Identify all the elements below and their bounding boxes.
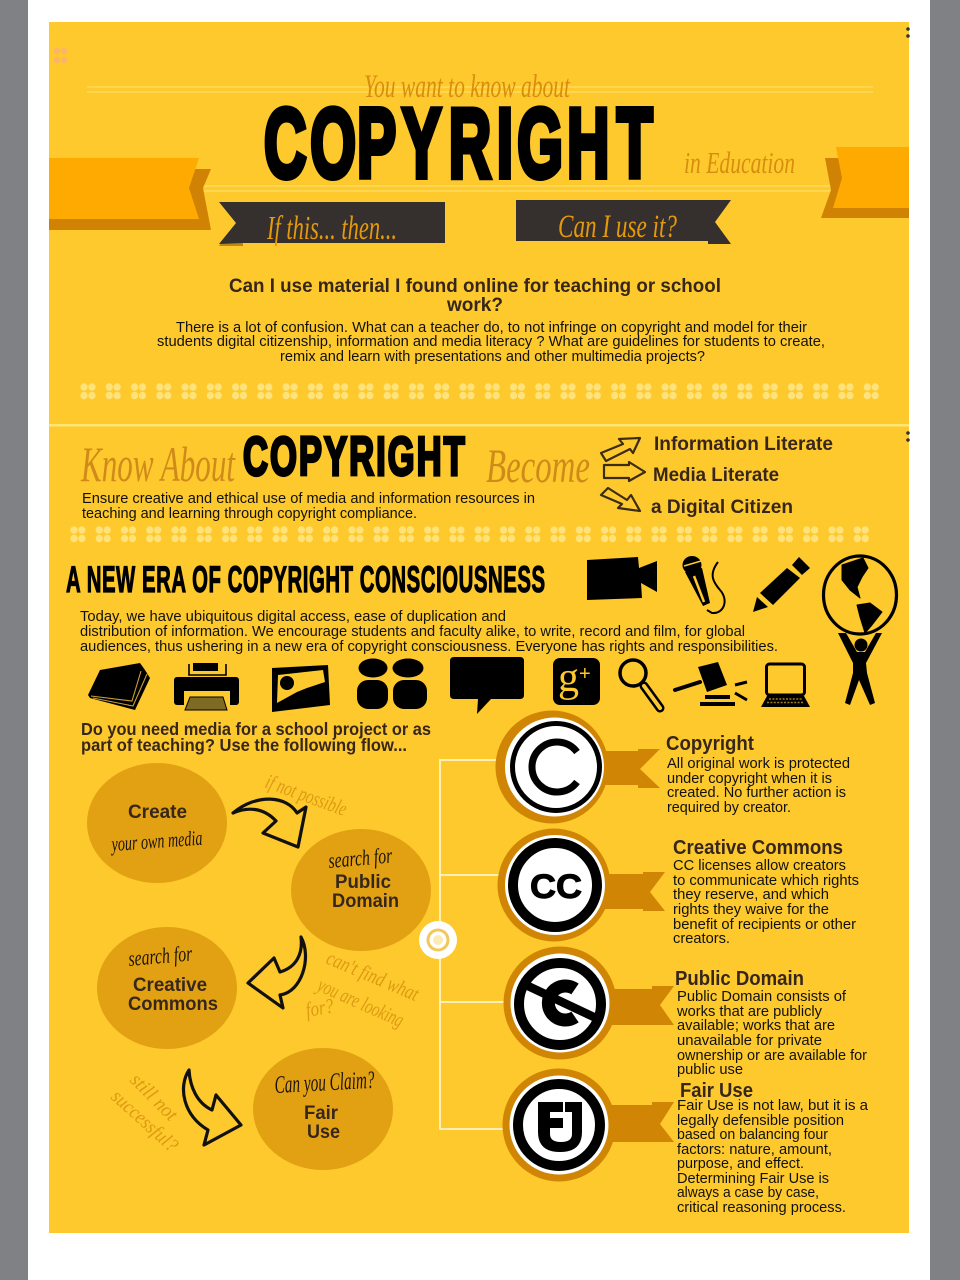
arrow: create to public domain (233, 799, 306, 847)
flow step: public domain: Public (335, 871, 391, 893)
icon: google plus (553, 655, 600, 705)
text block: fair use: legally defensible position (677, 1113, 844, 1129)
flow step: fair use: Use (307, 1121, 340, 1143)
icon: books (88, 663, 150, 710)
text block: public domain: ownership or are available for (677, 1048, 867, 1064)
note: can't find what you are looking for: you are looking (313, 972, 408, 1032)
note: still not successful: successful? (107, 1085, 182, 1157)
tagline: you want to know about: You want to know about (364, 69, 571, 105)
text block: fair use: critical reasoning process. (677, 1200, 846, 1216)
section paragraph (80, 609, 778, 655)
know about copyright heading (80, 425, 590, 493)
badge: creative commons (498, 828, 665, 942)
intro paragraph: There is a lot of confusion. What can a teacher do, to not infringe on copyright and model for their (176, 320, 807, 336)
dark banner: can I use it (516, 200, 731, 245)
text block: fair use: Fair Use is not law, but it is a (677, 1098, 869, 1114)
section paragraph: distribution of information. We encourage students and faculty alike, to write, record and film, for global (80, 624, 745, 640)
note: can't find what you are looking for: can't find what (323, 946, 423, 1006)
text block: creative commons: creators. (673, 931, 730, 947)
dark banner: if this then: If this... then... (266, 210, 397, 247)
dark banner: can I use it: Can I use it? (558, 209, 677, 245)
icon: speech bubble (450, 657, 524, 714)
text block: copyright: created. No further action is (667, 785, 846, 801)
know about description: teaching and learning through copyright compliance. (82, 506, 417, 522)
text block: fair use: Fair Use (680, 1080, 753, 1102)
badge: creative commons: CC (530, 868, 582, 906)
section heading: a new era: A NEW ERA OF COPYRIGHT CONSCIOUSNESS (66, 560, 545, 601)
icon: microphone (682, 556, 725, 613)
flow step: creative commons: search for (127, 940, 194, 971)
icon: magnifier (620, 660, 660, 708)
become list: a Digital Citizen (651, 497, 793, 518)
text block: fair use: purpose, and effect. (677, 1156, 804, 1172)
text block: public domain: unavailable for private (677, 1033, 822, 1049)
text block: copyright: Copyright (666, 733, 754, 755)
flow step: create (87, 763, 227, 883)
intro question heading: work? (446, 294, 503, 316)
know about description: Ensure creative and ethical use of media and information resources in (82, 491, 535, 507)
text block: creative commons: benefit of recipients or other (673, 917, 856, 933)
icon: pencil (753, 557, 810, 612)
become list (651, 434, 833, 518)
icon: three outline arrows (601, 438, 645, 511)
icon: picture frame (272, 665, 330, 712)
text block: creative commons: rights they waive for the (673, 902, 829, 918)
flow step: fair use: Fair (304, 1102, 338, 1124)
badge: public domain (504, 946, 674, 1060)
icon: google plus: + (579, 663, 591, 685)
flow step: creative commons: Commons (128, 993, 218, 1015)
connector target node (419, 921, 457, 959)
flow question heading: Do you need media for a school project or as (81, 719, 431, 739)
know about description (82, 491, 535, 522)
intro question heading (229, 275, 721, 316)
connector lines (440, 760, 506, 1129)
right ribbon (821, 147, 909, 218)
dark banner: if this then (219, 202, 445, 247)
badge: fair use (502, 1068, 674, 1182)
become list: Media Literate (653, 465, 779, 486)
text block: copyright: All original work is protected (667, 756, 850, 772)
become list: Information Literate (654, 434, 833, 455)
flow step: fair use: Can you Claim? (274, 1067, 375, 1099)
text block: public domain: Public Domain consists of (677, 989, 847, 1005)
note: still not successful: still not (125, 1069, 182, 1126)
intro paragraph: students digital citizenship, information and media literacy ? What are guidelines for students to create, (157, 334, 825, 350)
note: if not possible: if not possible (262, 769, 350, 821)
icon: laptop (761, 664, 810, 707)
know about copyright heading: COPYRIGHT (243, 425, 465, 487)
text block: public domain: works that are publicly (676, 1004, 823, 1020)
icon: printer (174, 663, 239, 710)
icon: video camera (587, 557, 657, 600)
section paragraph: Today, we have ubiquitous digital access, ease of duplication and (80, 609, 506, 625)
flow step: public domain: Domain (332, 890, 399, 912)
icon: google plus: g (558, 655, 579, 701)
main title: COPYRIGHT (264, 90, 653, 199)
text block: fair use: Determining Fair Use is (677, 1171, 829, 1187)
note: can't find what you are looking for: for? (304, 993, 336, 1022)
icon: gavel (675, 662, 747, 706)
left ribbon (49, 158, 211, 230)
header banner (49, 27, 910, 442)
flow step: public domain (291, 829, 431, 951)
section paragraph: audiences, thus ushering in a new era of copyright consciousness. Everyone has rights and responsibilities. (80, 639, 778, 655)
know about copyright heading: Know About (80, 436, 236, 492)
text block: creative commons: to communicate which rights (673, 873, 859, 889)
intro paragraph: remix and learn with presentations and other multimedia projects? (280, 349, 705, 365)
flow step: fair use (253, 1048, 393, 1170)
text block: creative commons: they reserve, and which (673, 887, 829, 903)
text block: creative commons: Creative Commons (673, 837, 843, 859)
text block: fair use (677, 1080, 869, 1216)
flow step: create: your own media (109, 826, 203, 856)
text block: copyright: required by creator. (667, 800, 791, 816)
intro question heading: Can I use material I found online for teaching or school (229, 275, 721, 297)
icon: two people (357, 658, 427, 709)
text block: copyright (666, 733, 850, 816)
text block: copyright: under copyright when it is (667, 771, 832, 787)
text block: public domain (675, 968, 867, 1078)
text block: public domain: public use (677, 1062, 743, 1078)
note: can't find what you are looking for (304, 946, 423, 1032)
text block: fair use: factors: nature, amount, (677, 1142, 832, 1158)
flow question heading: part of teaching? Use the following flow... (81, 735, 407, 755)
text block: fair use: always a case by case, (677, 1185, 819, 1201)
flow step: creative commons (97, 927, 237, 1049)
know about copyright heading: Become (486, 440, 590, 493)
flow step: creative commons: Creative (133, 974, 207, 996)
badge: copyright (496, 710, 660, 824)
flow step: public domain: search for (327, 842, 394, 873)
icon: atlas carrying globe (824, 556, 896, 705)
text block: public domain: Public Domain (675, 968, 804, 990)
text block: fair use: based on balancing four (677, 1127, 828, 1143)
arrow: creative commons to fair use (183, 1070, 241, 1145)
tagline: in education: in Education (684, 145, 795, 180)
text block: public domain: available; works that are (677, 1018, 835, 1034)
flow question heading (81, 719, 431, 755)
arrow: public domain to creative commons (248, 937, 305, 1008)
text block: creative commons (673, 837, 859, 947)
intro paragraph (157, 320, 825, 365)
text block: creative commons: CC licenses allow creators (673, 858, 846, 874)
flow step: create: Create (128, 801, 187, 823)
